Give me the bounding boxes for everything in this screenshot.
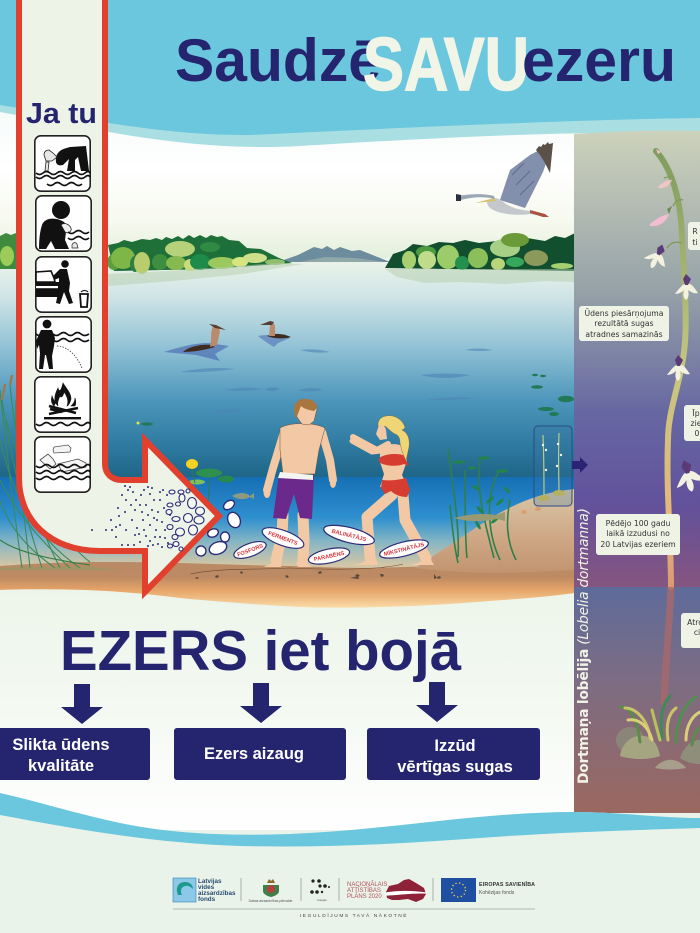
yellow water lily [186,459,234,503]
water ripples [180,348,493,413]
cream foreground [0,589,575,830]
note: cropped lower: ci [694,628,700,637]
note: cropped top: R [692,227,698,236]
man [263,399,336,567]
note: last 100 years: Pēdējo 100 gadu [606,519,670,528]
note: cropped middle: 0 [695,429,700,438]
box: species disappear: vērtīgas sugas [397,758,513,776]
box: poor water quality: Slikta ūdens [12,736,110,754]
aquatic plant [448,449,516,563]
note: last 100 years: 20 Latvijas ezeriem [600,540,676,549]
logo: National Development Plan: ATTĪSTĪBAS [347,887,381,894]
logo: dots [310,879,330,902]
flower stem [656,151,686,705]
pill: mīkstinātājs: MĪKSTINĀTĀJS [383,541,425,558]
panel background upper [574,131,700,587]
sandy lake bed [0,560,575,608]
pink flower buds [649,149,672,226]
red flow arrow [19,0,219,592]
note: cropped top [688,222,700,250]
box: lake overgrows [174,728,346,780]
forest: left edge [0,233,16,269]
logo dividers [241,878,433,901]
pill: balinātājs: BALINĀTĀJS [331,528,367,543]
arrow down 3 [416,682,458,722]
logo: LVAF: vides [198,884,215,891]
forest: right bank [385,233,575,271]
bubbles in arrow [166,489,204,551]
white flowers [641,240,700,495]
note: water pollution: rezultātā sugas [594,319,654,328]
reeds left [0,375,90,568]
right shore bank [415,489,575,573]
flower branches [664,176,683,248]
note: water pollution: Ūdens piesārņojuma [585,309,664,319]
logo: dots: Gaujas [317,898,327,902]
water lilies right [136,374,574,426]
logo: European Union: EIROPAS SAVIENĪBA [479,881,535,888]
vertical title: Dortmaņa lobēlija (Lobelia dortmanna) [576,508,592,784]
note: last 100 years: laikā izzudusi no [606,529,670,538]
pill: ferments [260,523,306,553]
box: poor water quality [0,728,150,780]
bottom wave [0,793,700,933]
box: species disappear: Izzūd [434,737,476,755]
pill: parabēns [307,545,351,567]
small inset habitat box [534,426,572,506]
small fish [232,493,254,499]
arrow down 2 [240,683,282,723]
icon: washing hair in lake [35,136,90,191]
title: ezeru: ezeru [522,27,676,94]
logo: National Development Plan: NACIONĀLAIS [347,881,387,888]
panel background lower [574,587,700,813]
logo: LVAF: Latvijas [198,878,222,885]
pill: fosfors [232,538,268,562]
logo: LVAF: fonds [198,896,216,903]
logo: Dabas aizsardzības pārvalde [249,879,292,903]
pill: parabēns: PARABĒNS [313,550,345,563]
icon: rubbish in lake [35,437,90,492]
shallow water [0,477,575,567]
note: cropped top: ti [692,238,698,247]
lake surface [0,258,575,477]
header band [0,0,700,147]
pill: balinātājs [322,521,376,549]
icon: person urinating in lake [36,317,91,372]
icon: campfire by lake [35,377,90,432]
heron [456,142,553,217]
logo: National Development Plan [347,879,426,902]
shore pebbles and seabed soil [190,507,541,579]
logo: LVAF: aizsardzības [198,890,236,897]
note: water pollution: atradnes samazinās [585,330,663,339]
logo: European Union [441,878,535,902]
grebes [164,321,291,361]
plant rosette and stones [616,696,700,770]
logo: Dabas aizsardzības pārvalde: Dabas aizsardzības pārvalde [249,899,292,903]
note: cropped lower [681,613,700,648]
sky [0,110,575,260]
particles in arrow [92,486,170,547]
right panel: Dortmaņa lobēlija [574,131,700,813]
note: last 100 years [596,514,680,555]
arrow to panel [572,457,588,473]
title [175,22,676,106]
chemical pills [232,521,430,567]
logo: LVAF [173,878,236,903]
pill: mīkstinātājs [378,536,430,562]
bubbles leaving arrow [195,498,243,557]
note: water pollution [579,306,669,341]
pill: ferments: FERMENTS [267,531,298,547]
arrow down 1 [61,684,103,724]
heading: EZERS iet bojā: EZERS iet bojā [60,619,462,683]
box: lake overgrows: Ezers aizaug [204,745,304,763]
note: cropped middle [684,405,700,441]
icon: washing in lake [36,196,91,251]
box: species disappear [367,728,540,780]
logo: European Union: Kohēzijas fonds [479,890,515,896]
box: poor water quality: kvalitāte [28,757,94,775]
pike fish [454,512,505,521]
pill: fosfors: FOSFORS [237,543,264,558]
tree reflection [108,263,575,286]
lower shoreline soil left [0,566,120,570]
woman [352,416,434,565]
tagline: IEGULDĪJUMS TAVĀ NĀKOTNĒ [300,912,408,919]
note: cropped middle: Īp [692,409,700,418]
title: SAVU: SAVU [363,22,529,106]
logo: National Development Plan: PLĀNS 2020 [347,893,382,900]
distant hills [278,246,390,262]
icon: washing car [36,257,91,312]
heading: Ja tu: Ja tu [26,98,97,130]
forest: left bank [107,235,292,274]
title: Saudzē: Saudzē [175,27,381,94]
